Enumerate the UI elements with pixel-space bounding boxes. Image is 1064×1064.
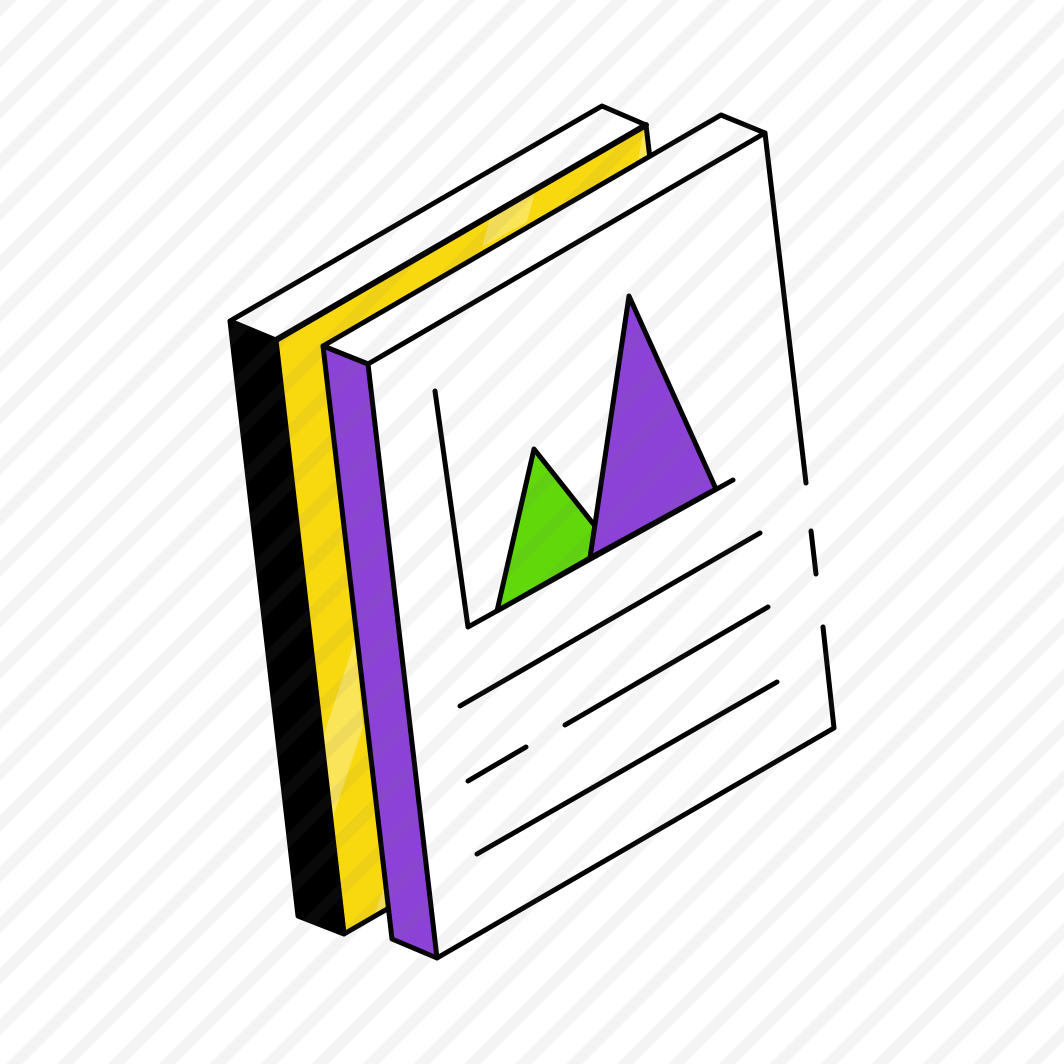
yellow cover highlights bbox=[323, 128, 650, 913]
back book bbox=[230, 106, 716, 934]
front book bbox=[323, 115, 834, 958]
chart axes bbox=[435, 391, 733, 627]
front book spine bbox=[323, 346, 437, 958]
front book top edge bbox=[323, 115, 765, 364]
back book top edge bbox=[230, 106, 646, 340]
cover top edge line bbox=[276, 125, 646, 340]
purple triangle bbox=[590, 296, 716, 558]
back book spine bbox=[230, 321, 344, 934]
front book page outline bbox=[437, 133, 834, 958]
back book cover outline bbox=[276, 125, 716, 934]
text lines bbox=[460, 533, 777, 854]
chart: triangles on axes bbox=[435, 296, 733, 627]
front book page fill bbox=[368, 133, 834, 958]
back book cover fill bbox=[276, 125, 716, 934]
green triangle bbox=[497, 449, 595, 611]
